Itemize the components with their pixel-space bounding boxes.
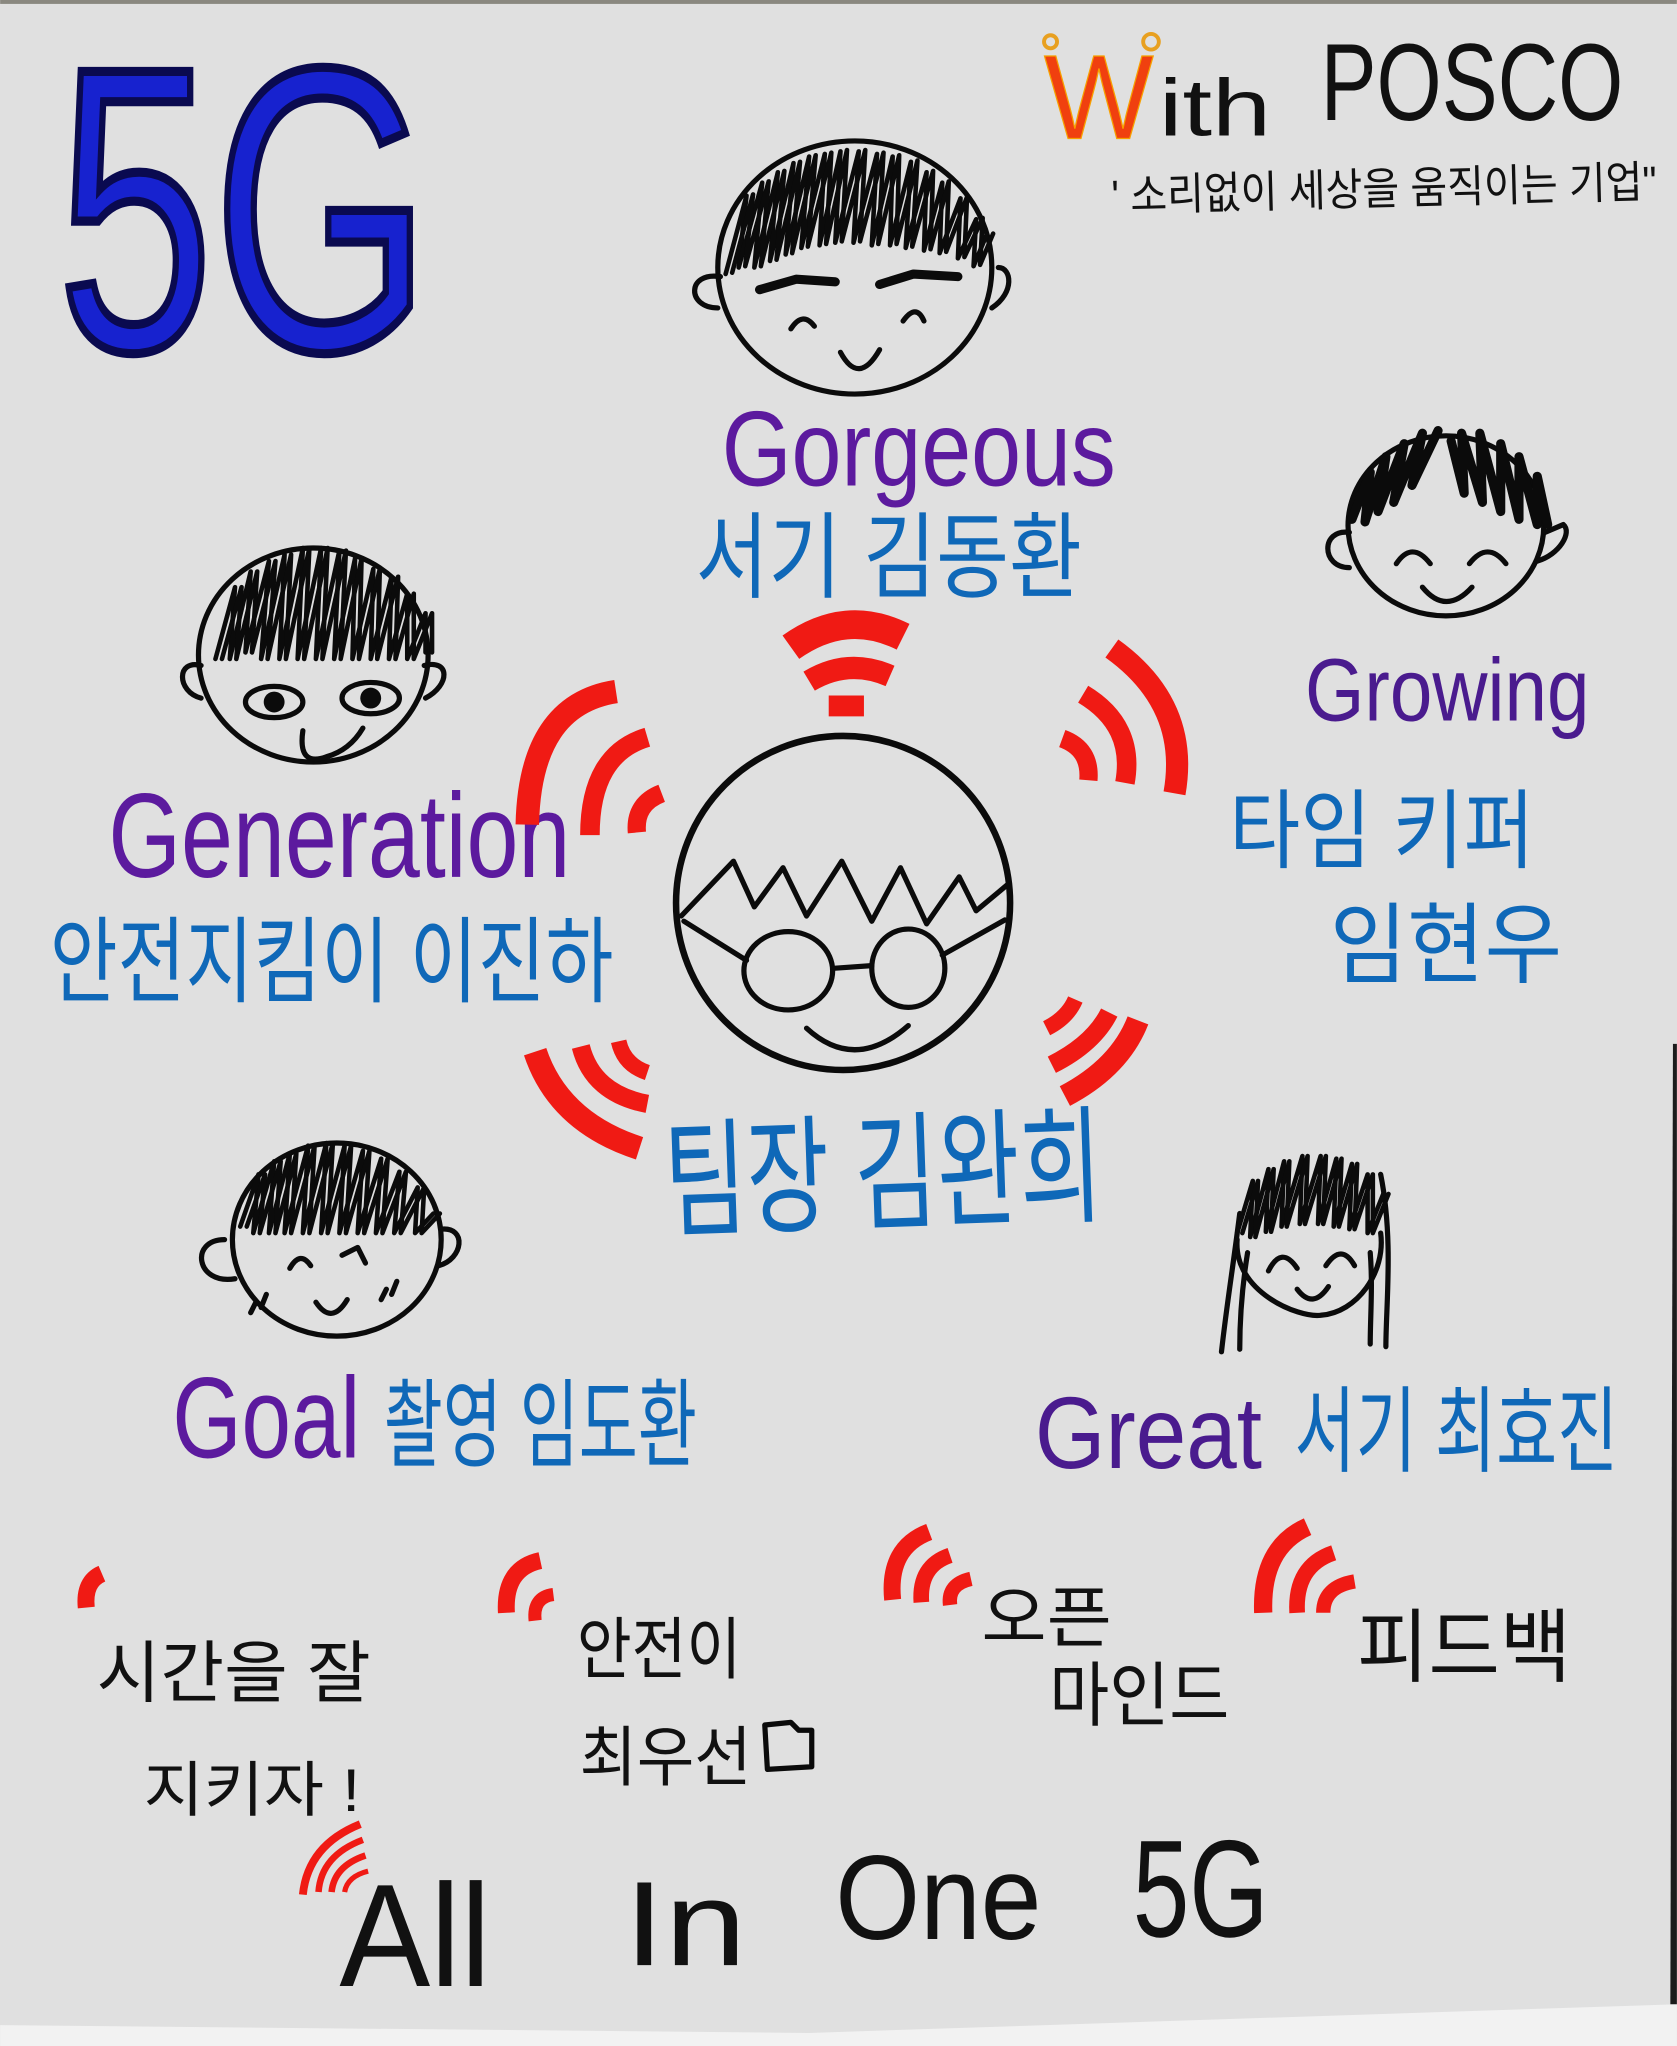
label: 임현우: 임현우 xyxy=(1330,896,1562,995)
value: 오픈 마인드 xyxy=(892,1532,1229,1735)
face: Great xyxy=(1221,1156,1388,1352)
value: 안전이 최우선: 안전이 xyxy=(577,1613,741,1688)
label: 팀장 김완희: 팀장 김완희 xyxy=(662,1096,1105,1255)
footer: All In One 5G: 5G xyxy=(1133,1812,1268,1966)
face: Goal xyxy=(202,1143,459,1336)
value: 안전이 최우선 xyxy=(506,1561,812,1794)
icon: note xyxy=(765,1722,812,1769)
label: 안전지킴이 이진하: 안전지킴이 이진하 xyxy=(50,909,613,1014)
value: 피드백 xyxy=(1263,1527,1571,1693)
value: 시간을 잘 지키자: 지키자 ! xyxy=(144,1757,360,1824)
value: 안전이 최우선: 최우선 xyxy=(579,1721,752,1794)
value: 피드백: 피드백 xyxy=(1357,1603,1571,1693)
signal waves: lower right xyxy=(1047,1000,1138,1096)
heading: With POSCO: W xyxy=(1044,30,1154,164)
value: 오픈 마인드: 오픈 xyxy=(981,1581,1112,1656)
value: 시간을 잘 지키자 xyxy=(86,1574,371,1824)
label: Growing: Growing xyxy=(1305,640,1589,739)
heading: With POSCO: ith xyxy=(1159,64,1271,154)
label: 촬영 임도환: 촬영 임도환 xyxy=(384,1373,697,1480)
value: 오픈 마인드: 마인드 xyxy=(1049,1656,1229,1735)
heading: With POSCO xyxy=(1044,22,1623,164)
footer: All In One 5G xyxy=(303,1812,1268,2017)
signal waves: lower left xyxy=(535,1041,647,1148)
label: 서기 김동환: 서기 김동환 xyxy=(696,505,1082,610)
footer: All In One 5G: In xyxy=(624,1857,747,1991)
label: 타임 키퍼: 타임 키퍼 xyxy=(1229,784,1535,880)
label: Gorgeous: Gorgeous xyxy=(722,388,1116,508)
label: Goal: Goal xyxy=(172,1355,360,1483)
label: Generation: Generation xyxy=(108,769,570,903)
face: Gorgeous xyxy=(695,141,1009,394)
face: Growing xyxy=(1328,431,1566,616)
center face: team leader xyxy=(676,736,1010,1070)
footer: All In One 5G: All xyxy=(339,1854,491,2017)
signal waves: top xyxy=(791,625,903,706)
signal waves: upper left xyxy=(527,692,662,835)
signal waves: upper right xyxy=(1062,649,1177,793)
label: Great: Great xyxy=(1035,1376,1262,1490)
face: Generation xyxy=(182,548,444,762)
value: 시간을 잘 지키자: 시간을 잘 xyxy=(97,1636,371,1711)
footer: All In One 5G: One xyxy=(835,1831,1041,1965)
